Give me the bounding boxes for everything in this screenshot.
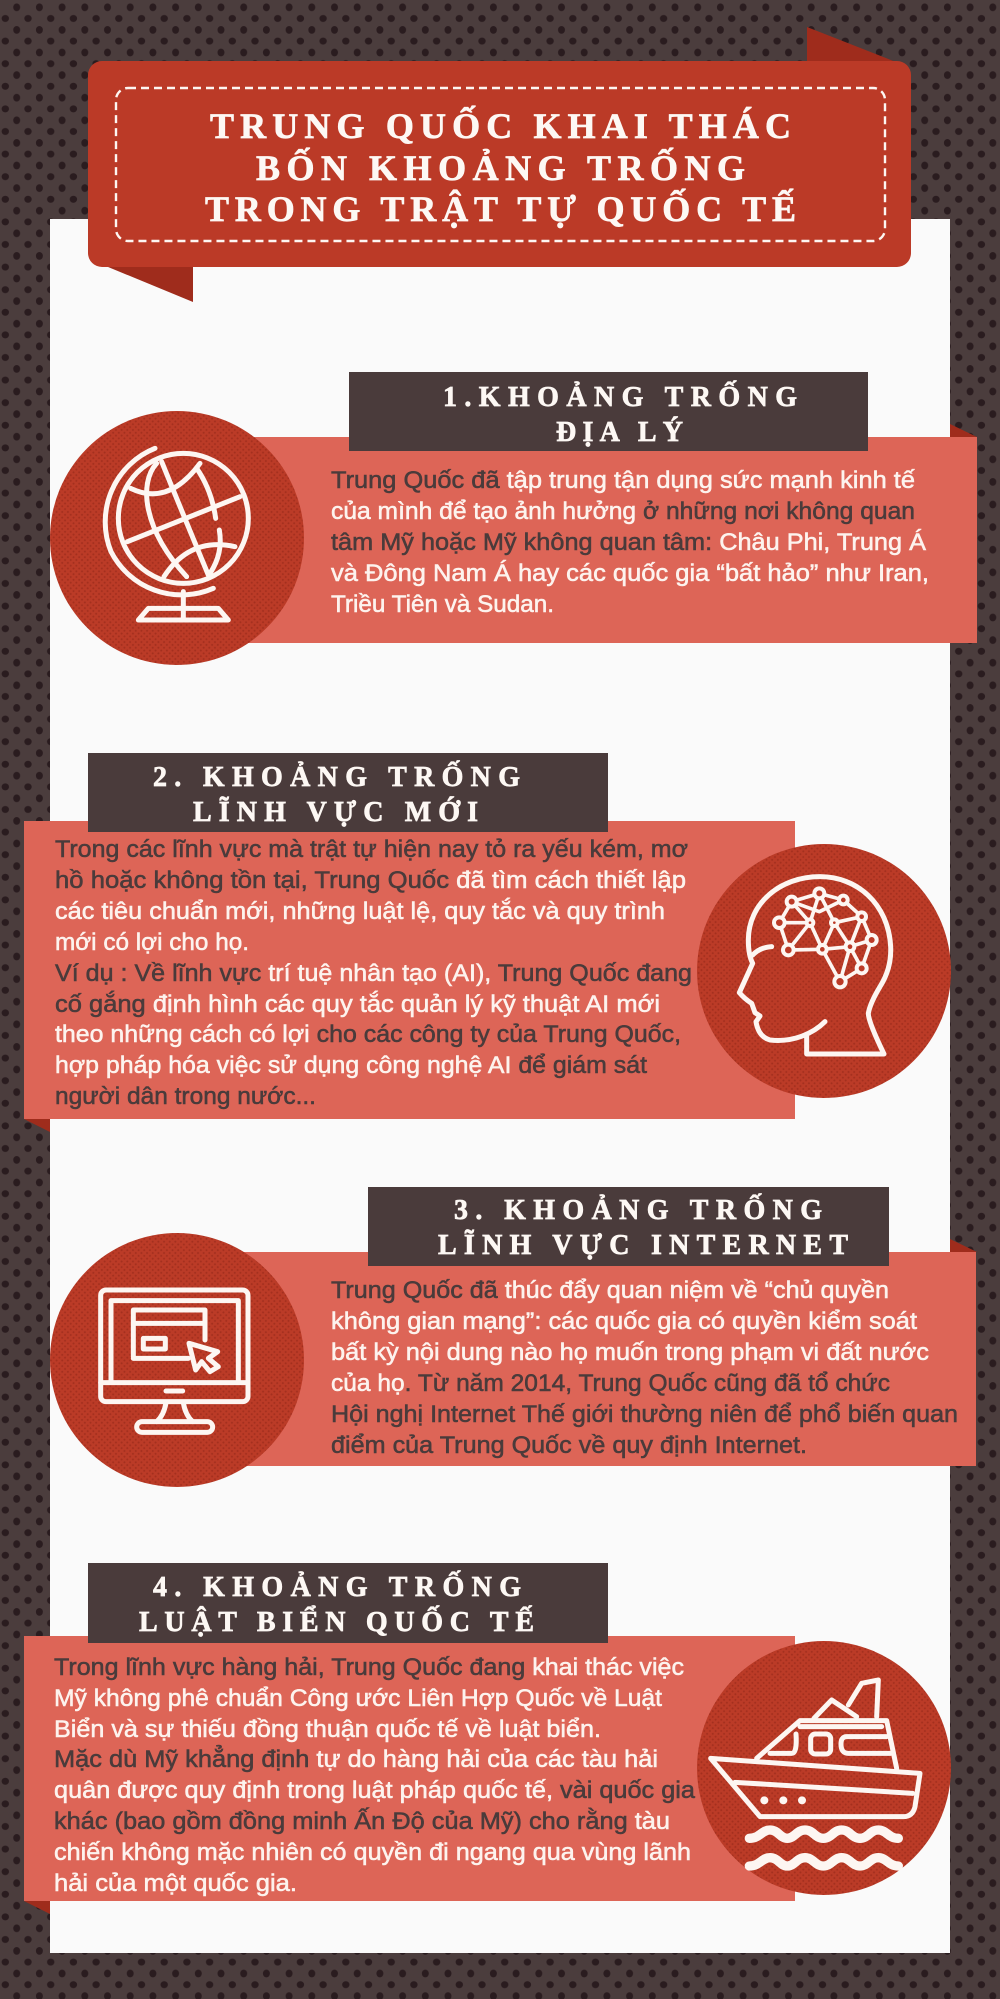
body text: Trong lĩnh vực hàng hải, Trung Quốc đang khai thác việc [54, 1654, 684, 1681]
heading [368, 1187, 889, 1266]
body text: Trung Quốc đã thúc đẩy quan niệm về “chủ quyền [331, 1277, 889, 1304]
body text: Trung Quốc đã tập trung tận dụng sức mạnh kinh tế [331, 467, 915, 494]
circle badge [697, 1641, 951, 1895]
body text: của mình để tạo ảnh hưởng ở những nơi không quan [331, 498, 915, 525]
corner fold [950, 1239, 977, 1252]
body text: Mặc dù Mỹ khẳng định tự do hàng hải của các tàu hải [54, 1744, 658, 1773]
body text [55, 836, 692, 1110]
body text [331, 467, 929, 618]
body text: không gian mạng”: các quốc gia có quyền kiểm soát [331, 1308, 917, 1335]
heading [349, 372, 868, 451]
ribbon fold bottom left [96, 262, 193, 302]
title text: TRONG TRẬT TỰ QUỐC TẾ [205, 188, 796, 229]
heading: 2. KHOẢNG TRỐNG [153, 761, 520, 793]
text bar [177, 1252, 976, 1466]
corner fold [24, 1119, 50, 1132]
body text [331, 1277, 958, 1459]
body text: Hội nghị Internet Thế giới thường niên để phổ biến quan [331, 1401, 958, 1428]
icon: ship on waves [711, 1680, 920, 1866]
section 2: new fields gap [24, 753, 951, 1132]
banner body [88, 61, 911, 267]
heading: 4. KHOẢNG TRỐNG [153, 1571, 521, 1603]
heading: LĨNH VỰC INTERNET [438, 1230, 848, 1261]
body text: theo những cách có lợi cho các công ty của Trung Quốc, [55, 1021, 681, 1048]
icon: globe [105, 448, 248, 620]
body text: Triều Tiên và Sudan. [331, 591, 554, 618]
body text: của họ. Từ năm 2014, Trung Quốc cũng đã tổ chức [331, 1370, 890, 1397]
section 3: internet gap [50, 1187, 977, 1487]
section 1: geographic gap [50, 372, 977, 665]
corner fold [950, 424, 977, 437]
white content panel [50, 219, 950, 1953]
body text: người dân trong nước... [55, 1083, 316, 1110]
ribbon fold top right [807, 27, 896, 62]
body text: hải của một quốc gia. [54, 1870, 297, 1897]
body text: bất kỳ nội dung nào họ muốn trong phạm vi đất nước [331, 1339, 929, 1366]
heading: 3. KHOẢNG TRỐNG [454, 1194, 822, 1226]
body text: hồ hoặc không tồn tại, Trung Quốc đã tìm cách thiết lập [55, 867, 686, 894]
heading: LUẬT BIỂN QUỐC TẾ [139, 1606, 534, 1638]
body text: chiến không mặc nhiên có quyền đi ngang qua vùng lãnh [54, 1839, 691, 1866]
body text: mới có lợi cho họ. [55, 929, 249, 956]
section 4: law of the sea gap [24, 1563, 951, 1914]
body text: tâm Mỹ hoặc Mỹ không quan tâm: Châu Phi, Trung Á [331, 529, 927, 556]
corner fold [24, 1901, 50, 1914]
title text [205, 105, 796, 229]
body text: Trong các lĩnh vực mà trật tự hiện nay tỏ ra yếu kém, mơ [55, 836, 688, 863]
dashed inner border [116, 88, 885, 241]
body text: khác (bao gồm đồng minh Ấn Độ của Mỹ) cho rằng tàu [54, 1807, 670, 1835]
body text: cố gắng định hình các quy tắc quản lý kỹ thuật AI mới [55, 991, 660, 1018]
body text: các tiêu chuẩn mới, những luật lệ, quy tắc và quy trình [55, 898, 665, 925]
body text: hợp pháp hóa việc sử dụng công nghệ AI để giám sát [55, 1052, 647, 1079]
body text: và Đông Nam Á hay các quốc gia “bất hảo” như Iran, [331, 560, 929, 587]
title text: BỐN KHOẢNG TRỐNG [256, 147, 745, 188]
body text: quân được quy định trong luật pháp quốc tế, vài quốc gia [54, 1777, 695, 1804]
circle badge [697, 844, 951, 1098]
circle badge [50, 1233, 304, 1487]
heading [88, 1563, 608, 1643]
body text: Ví dụ : Về lĩnh vực trí tuệ nhân tạo (AI), Trung Quốc đang [55, 960, 692, 987]
title banner [88, 27, 911, 302]
body text: Biển và sự thiếu đồng thuận quốc tế về luật biển. [54, 1716, 601, 1743]
circle badge [50, 411, 304, 665]
heading: LĨNH VỰC MỚI [193, 797, 478, 828]
body text: điểm của Trung Quốc về quy định Internet. [331, 1432, 807, 1459]
body text [54, 1654, 695, 1897]
text bar [24, 821, 795, 1119]
title text: TRUNG QUỐC KHAI THÁC [210, 105, 791, 146]
text bar [24, 1636, 795, 1901]
icon: head with neural network [739, 877, 891, 1054]
heading [88, 753, 608, 832]
heading: 1.KHOẢNG TRỐNG [443, 381, 797, 413]
text bar [177, 437, 977, 643]
heading: ĐỊA LÝ [556, 417, 683, 448]
icon: computer monitor with cursor [101, 1290, 248, 1432]
body text: Mỹ không phê chuẩn Công ước Liên Hợp Quốc về Luật [54, 1685, 662, 1712]
